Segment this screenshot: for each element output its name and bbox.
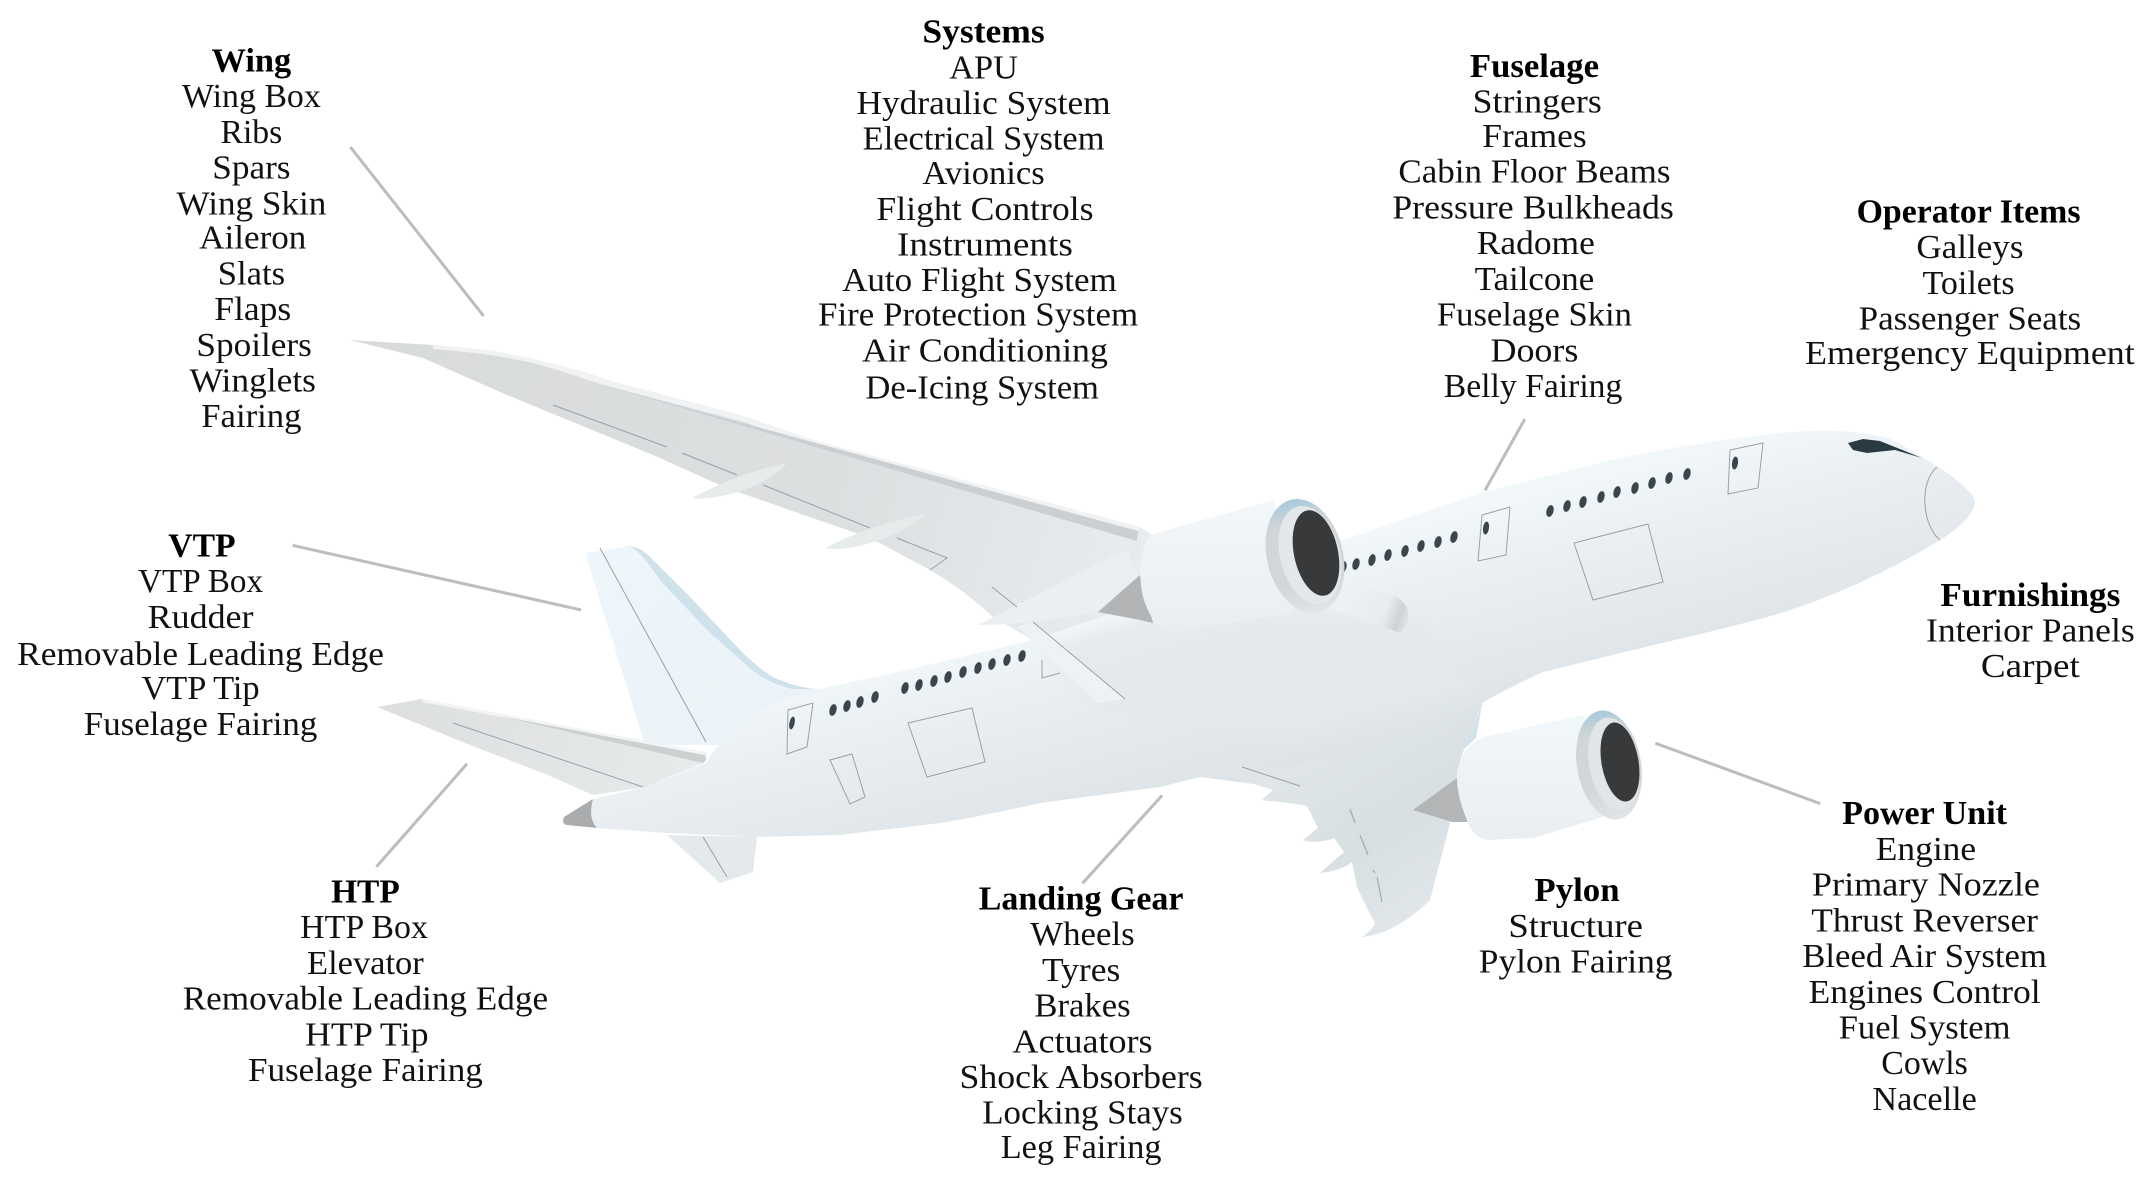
text block: Operator Items — [1805, 193, 2135, 372]
text block: Fuselage: Tailcone — [1475, 260, 1594, 298]
text block: Systems: Fire Protection System — [818, 296, 1138, 334]
text block: VTP: VTP Tip — [141, 669, 260, 707]
text block: Power Unit: Engines Control — [1809, 973, 2041, 1011]
text block: Operator Items: Galleys — [1916, 228, 2023, 266]
text block: Landing Gear: Locking Stays — [982, 1094, 1183, 1132]
leader line: wing — [350, 147, 484, 316]
text block: Landing Gear: Actuators — [1012, 1022, 1153, 1060]
text block: Wing: Winglets — [190, 362, 316, 400]
text block: Power Unit — [1802, 794, 2047, 1118]
text block: Operator Items: Passenger Seats — [1859, 300, 2081, 338]
text block: Landing Gear: Wheels — [1030, 915, 1135, 953]
text block: Operator Items: Emergency Equipment — [1805, 334, 2135, 372]
text block: Operator Items: Operator Items — [1857, 193, 2080, 231]
text block: Systems: Instruments — [897, 226, 1073, 264]
text block: Systems: De-Icing System — [865, 368, 1099, 406]
text block: Wing: Spars — [212, 149, 291, 187]
text block: Pylon — [1479, 871, 1673, 981]
leader line: landing gear — [1082, 795, 1162, 883]
tail cone — [563, 799, 597, 828]
horizontal stabiliser — [377, 699, 707, 795]
text block: VTP: VTP Box — [138, 562, 263, 600]
text block: VTP: Fuselage Fairing — [84, 705, 317, 743]
text block: Power Unit: Thrust Reverser — [1811, 901, 2038, 939]
text block: Fuselage: Radome — [1477, 224, 1595, 262]
text block: Power Unit: Nacelle — [1872, 1080, 1977, 1118]
text block: VTP — [17, 526, 384, 743]
text block: Power Unit: Bleed Air System — [1802, 937, 2047, 975]
text block: Wing: Wing Skin — [177, 184, 326, 222]
text block: Fuselage: Cabin Floor Beams — [1398, 153, 1670, 191]
leader line: power unit — [1655, 743, 1820, 804]
nose radome line — [1925, 467, 1940, 540]
text block: Furnishings: Furnishings — [1940, 576, 2120, 614]
text block: Power Unit: Power Unit — [1842, 794, 2008, 832]
text block: HTP: HTP Tip — [305, 1015, 429, 1053]
text block: Systems — [818, 13, 1138, 406]
cabin windows — [788, 456, 1739, 730]
cockpit windows — [1848, 439, 1922, 458]
leader line: HTP — [376, 764, 467, 867]
text block: Systems: Air Conditioning — [862, 331, 1108, 369]
text block: VTP: VTP — [168, 526, 236, 564]
text block: HTP: HTP — [331, 873, 400, 911]
text block: Wing: Flaps — [214, 290, 291, 328]
text block: Landing Gear: Brakes — [1034, 987, 1131, 1025]
text block: HTP: HTP Box — [300, 908, 428, 946]
text block: Fuselage: Fuselage — [1470, 47, 1599, 85]
text block: Wing: Aileron — [199, 219, 306, 257]
text block: Wing: Wing — [212, 41, 291, 79]
text block: Landing Gear — [960, 879, 1203, 1166]
upper engine pylon tube — [1327, 582, 1408, 633]
text block: Wing — [177, 41, 326, 435]
wing-body shading — [1040, 600, 1480, 740]
text block: Power Unit: Primary Nozzle — [1812, 866, 2040, 904]
flap fairing 2 — [825, 515, 925, 549]
text block: Fuselage — [1392, 47, 1674, 405]
text block: Fuselage: Frames — [1482, 117, 1587, 155]
text block: Systems: Electrical System — [863, 120, 1105, 158]
text block: Pylon: Pylon Fairing — [1479, 943, 1673, 981]
text block: Furnishings: Interior Panels — [1926, 612, 2135, 650]
text block: Fuselage: Belly Fairing — [1444, 367, 1622, 405]
text block: Fuselage: Pressure Bulkheads — [1392, 188, 1674, 226]
text block: Systems: Avionics — [922, 154, 1045, 192]
text block: HTP: Fuselage Fairing — [248, 1051, 483, 1089]
text block: Furnishings: Carpet — [1981, 647, 2080, 685]
text block: Landing Gear: Landing Gear — [979, 879, 1183, 917]
vertical tail fin — [585, 546, 820, 745]
text block: Wing: Fairing — [201, 397, 302, 435]
text block: Landing Gear: Tyres — [1042, 951, 1120, 989]
flap fairing 1 — [692, 463, 787, 499]
text block: Wing: Slats — [218, 254, 285, 292]
doors and panels — [787, 443, 1763, 804]
text block: Fuselage: Stringers — [1473, 83, 1602, 121]
text block: Operator Items: Toilets — [1923, 264, 2015, 302]
upper engine — [1098, 491, 1356, 632]
text block: HTP: Elevator — [307, 944, 424, 982]
text block: Fuselage: Fuselage Skin — [1437, 296, 1632, 334]
text block: Systems: Hydraulic System — [857, 84, 1111, 122]
text block: VTP: Rudder — [148, 598, 254, 636]
text block: VTP: Removable Leading Edge — [17, 635, 384, 673]
text block: Pylon: Structure — [1508, 907, 1643, 945]
text block: Pylon: Pylon — [1534, 871, 1620, 909]
text block: Systems: Flight Controls — [876, 190, 1093, 228]
text block: Wing: Ribs — [220, 113, 282, 151]
text block: Systems: Systems — [922, 13, 1045, 51]
text block: Furnishings — [1926, 576, 2135, 685]
leader line: fuselage — [1485, 419, 1525, 490]
text block: Systems: APU — [949, 48, 1018, 86]
ventral fin — [667, 835, 757, 883]
near wing (lower) — [1200, 703, 1483, 937]
text block: HTP — [183, 873, 548, 1089]
leader line: VTP — [293, 545, 581, 610]
text block: Landing Gear: Leg Fairing — [1001, 1128, 1161, 1166]
far wing (upper left) — [350, 340, 1160, 640]
text block: Landing Gear: Shock Absorbers — [960, 1058, 1203, 1096]
text block: HTP: Removable Leading Edge — [183, 980, 548, 1018]
text block: Power Unit: Engine — [1876, 830, 1976, 868]
text block: Wing: Spoilers — [196, 326, 312, 364]
wing root fairing — [977, 550, 1150, 703]
text block: Power Unit: Fuel System — [1839, 1009, 2011, 1047]
text block: Systems: Auto Flight System — [842, 261, 1117, 299]
fuselage — [563, 431, 1975, 837]
text block: Wing: Wing Box — [182, 77, 321, 115]
aircraft illustration — [350, 340, 1975, 937]
text block: Fuselage: Doors — [1490, 331, 1578, 369]
lower engine — [1413, 705, 1650, 840]
text block: Power Unit: Cowls — [1881, 1044, 1968, 1082]
